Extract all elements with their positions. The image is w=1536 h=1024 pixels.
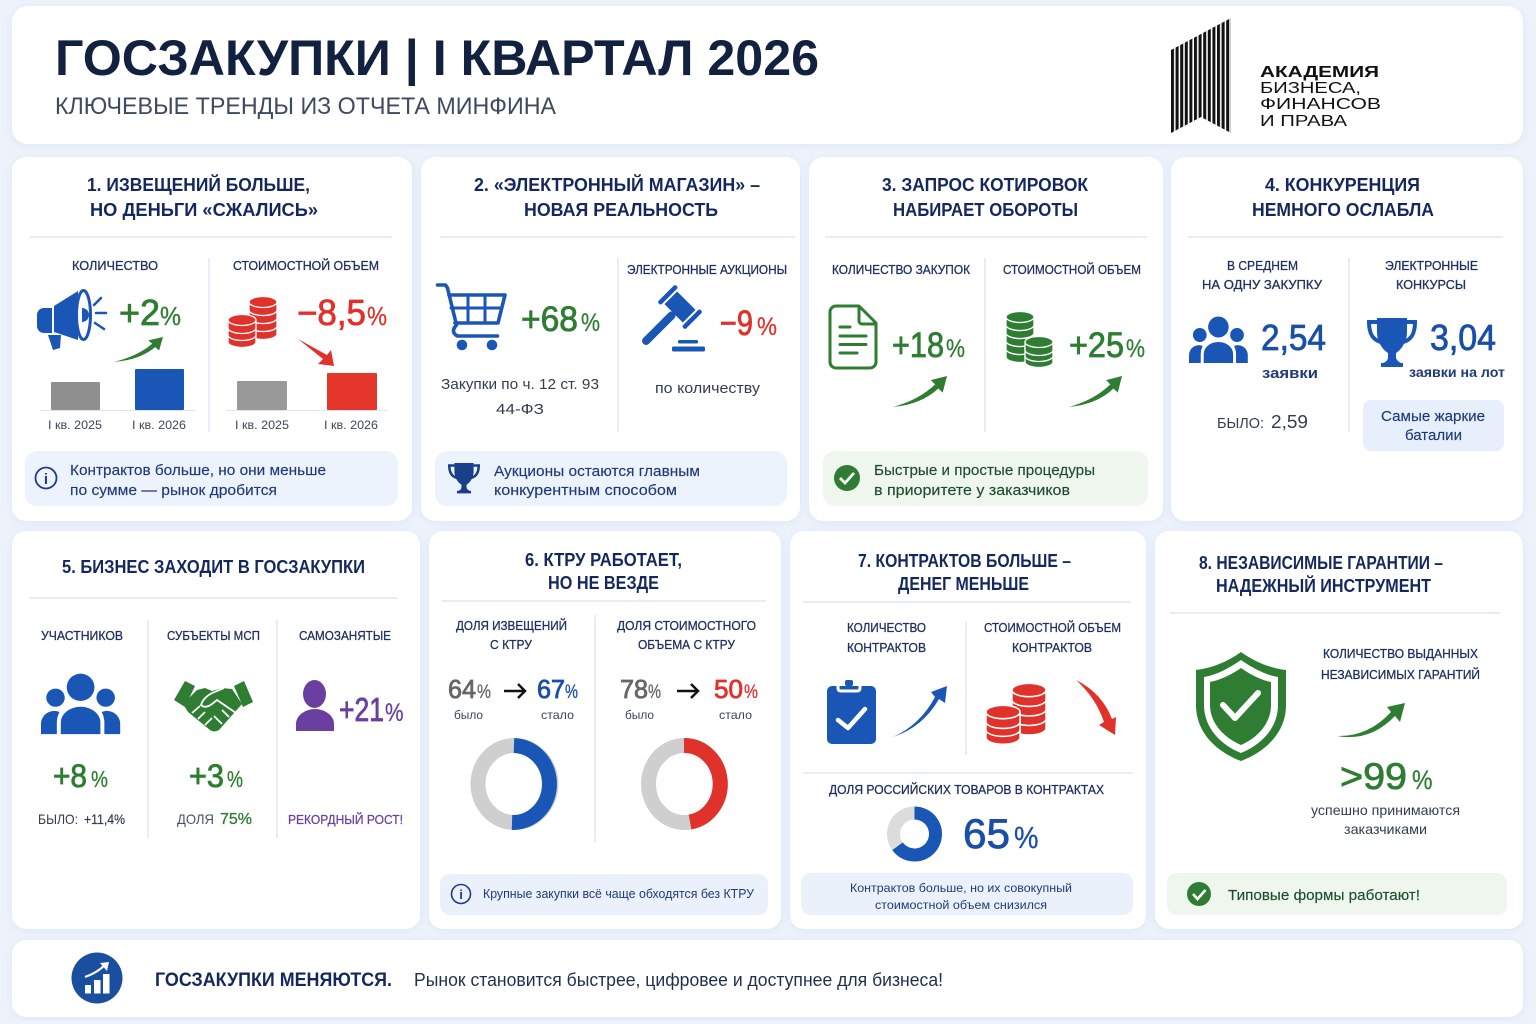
caption: bids: заявки: [1262, 365, 1318, 382]
heading 3: 3. ЗАПРОС КОТИРОВОК: [882, 174, 1089, 195]
icon: megaphone: [37, 290, 106, 350]
label contract value: [984, 620, 1121, 655]
value: plus 68 percent: %: [581, 309, 600, 337]
previous value: [1217, 412, 1308, 432]
comparison: value: стало: [719, 708, 752, 722]
arrow up: [114, 337, 163, 362]
comparison: value: 78: [620, 674, 648, 704]
bars: value: [226, 373, 388, 432]
heading 8: 8. НЕЗАВИСИМЫЕ ГАРАНТИИ –: [1199, 552, 1443, 573]
value: plus 25 percent: +25: [1069, 326, 1124, 365]
heading 6: 6. КТРУ РАБОТАЕТ,: [525, 549, 682, 570]
heading 4: НЕМНОГО ОСЛАБЛА: [1252, 199, 1434, 220]
donut: Russian goods: [894, 813, 936, 855]
note 6: Крупные закупки всё чаще обходятся без КТРУ: [483, 887, 754, 901]
panel 2: e-shop: [421, 157, 800, 521]
value: minus 8.5 percent: %: [367, 301, 387, 331]
value: 65 percent: [963, 810, 1038, 857]
label guarantees: НЕЗАВИСИМЫХ ГАРАНТИЙ: [1321, 667, 1480, 682]
icon: growth chart: [72, 952, 122, 1004]
value: 65 percent: 65: [963, 810, 1010, 857]
label guarantees: КОЛИЧЕСТВО ВЫДАННЫХ: [1323, 646, 1478, 661]
previous value: БЫЛО:: [1217, 415, 1264, 432]
footer heading: ГОСЗАКУПКИ МЕНЯЮТСЯ.: [155, 970, 392, 991]
label notices share: ДОЛЯ ИЗВЕЩЕНИЙ: [456, 618, 567, 633]
comparison: value: %: [648, 682, 661, 703]
comparison: notices: [448, 674, 578, 722]
label auctions: ЭЛЕКТРОННЫЕ АУКЦИОНЫ: [627, 262, 787, 277]
note 7: [801, 873, 1133, 915]
heading 1: 1. ИЗВЕЩЕНИЙ БОЛЬШЕ,: [87, 174, 310, 195]
note 1: по сумме — рынок дробится: [70, 482, 277, 499]
note 3: в приоритете у заказчиков: [874, 482, 1070, 499]
heading 7: ДЕНЕГ МЕНЬШЕ: [898, 573, 1029, 594]
arrow down: [298, 339, 334, 366]
comparison: value: было: [625, 708, 654, 722]
caption: accepted: [1311, 802, 1460, 837]
label contests: ЭЛЕКТРОННЫЕ: [1385, 258, 1478, 273]
label value: СТОИМОСТНОЙ ОБЪЕМ: [233, 258, 379, 273]
label contract count: КОНТРАКТОВ: [847, 640, 926, 655]
note 7: Контрактов больше, но их совокупный: [850, 881, 1072, 895]
icon: clipboard: [827, 680, 876, 744]
heading 2: 2. «ЭЛЕКТРОННЫЙ МАГАЗИН» –: [474, 174, 760, 195]
value: plus 18 percent: %: [946, 335, 965, 363]
panel 5: business: [12, 531, 420, 929]
comparison: value: [620, 674, 758, 722]
logo text: И ПРАВА: [1260, 113, 1347, 130]
caption: bids per lot: заявки на лот: [1409, 364, 1505, 380]
value: plus 8 percent: %: [91, 766, 108, 792]
note 3: [823, 451, 1148, 506]
donut: notices: [478, 746, 551, 823]
icon: shield: [1196, 652, 1286, 761]
comparison: notices: 64: [448, 674, 476, 704]
arrow up: [1069, 376, 1122, 407]
logo mark: [1171, 18, 1231, 133]
bars: quantity: [40, 369, 195, 432]
value: plus 18 percent: +18: [892, 326, 944, 365]
donut: value: [648, 745, 720, 822]
note 1: [25, 451, 398, 506]
caption: by count: по количеству: [655, 380, 761, 397]
bars: value: I кв. 2025: [235, 418, 289, 432]
bars: quantity: I кв. 2025: [48, 418, 102, 432]
caption: article: Закупки по ч. 12 ст. 93: [441, 376, 599, 393]
label average: [1202, 258, 1323, 292]
label value share: ДОЛЯ СТОИМОСТНОГО: [617, 618, 756, 633]
value: 2.54: 2,54: [1261, 317, 1326, 358]
value: minus 9 percent: −9: [720, 304, 753, 343]
note 3: Быстрые и простые процедуры: [874, 462, 1095, 479]
heading 3: НАБИРАЕТ ОБОРОТЫ: [893, 199, 1078, 220]
icon: gavel: [629, 284, 705, 358]
value: plus 2 percent: %: [160, 301, 181, 331]
icon: red coins: [986, 683, 1046, 744]
callout: баталии: [1405, 427, 1462, 444]
note 8: [1167, 873, 1507, 915]
footer text: Рынок становится быстрее, цифровее и доступнее для бизнеса!: [414, 970, 943, 990]
logo text: [1260, 64, 1381, 130]
header panel: [12, 6, 1523, 144]
value: plus 21 percent: +21: [339, 691, 384, 728]
heading 6: [525, 549, 682, 593]
arrow up: [893, 376, 947, 407]
icon: cart: [438, 285, 505, 348]
comparison: value: %: [744, 682, 758, 703]
icon: trophy: [1369, 318, 1415, 367]
comparison: notices: было: [454, 708, 483, 722]
caption: previous: [38, 811, 125, 827]
label contract count: КОЛИЧЕСТВО: [847, 620, 926, 635]
heading 7: 7. КОНТРАКТОВ БОЛЬШЕ –: [858, 550, 1071, 571]
comparison: notices: стало: [541, 708, 574, 722]
note 1: i: [44, 471, 48, 488]
subtitle: КЛЮЧЕВЫЕ ТРЕНДЫ ИЗ ОТЧЕТА МИНФИНА: [55, 93, 556, 120]
note 7: стоимостной объем снизился: [875, 898, 1047, 912]
bars: value: I кв. 2026: [324, 418, 378, 432]
label contract value: СТОИМОСТНОЙ ОБЪЕМ: [984, 620, 1121, 635]
comparison: notices: 67: [537, 674, 565, 704]
heading 2: НОВАЯ РЕАЛЬНОСТЬ: [524, 199, 718, 220]
icon: participants: [41, 674, 120, 734]
value: 99 percent: >99: [1340, 756, 1407, 797]
column labels: САМОЗАНЯТЫЕ: [299, 628, 391, 643]
label purchases: КОЛИЧЕСТВО ЗАКУПОК: [832, 262, 970, 277]
value: plus 3 percent: %: [227, 766, 243, 792]
logo text: ФИНАНСОВ: [1260, 96, 1381, 113]
label value share: ОБЪЕМА С КТРУ: [638, 637, 736, 652]
value: minus 8.5 percent: −8,5: [297, 292, 366, 333]
caption: article: 44-ФЗ: [496, 401, 544, 418]
heading 7: [858, 550, 1071, 594]
heading 5: 5. БИЗНЕС ЗАХОДИТ В ГОСЗАКУПКИ: [62, 556, 365, 577]
caption: accepted: заказчиками: [1344, 821, 1427, 837]
note 1: Контрактов больше, но они меньше: [70, 462, 326, 479]
value: plus 2 percent: [119, 292, 181, 333]
value: plus 21 percent: %: [385, 699, 404, 727]
icon: handshake: [174, 681, 253, 732]
comparison: notices: %: [477, 682, 491, 703]
label average: НА ОДНУ ЗАКУПКУ: [1202, 277, 1323, 292]
previous value: 2,59: [1271, 412, 1308, 432]
heading 4: [1252, 174, 1434, 220]
panel 6: KTRU: [429, 531, 781, 929]
label value share: [617, 618, 756, 652]
callout: Самые жаркие: [1381, 408, 1485, 425]
icon: green coins: [1006, 312, 1053, 368]
icon: person: [296, 680, 334, 731]
icon: document: [830, 306, 876, 368]
value: plus 3 percent: +3: [189, 758, 224, 794]
label contests: [1385, 258, 1478, 292]
caption: share: 75%: [220, 811, 252, 828]
label average: В СРЕДНЕМ: [1227, 258, 1298, 273]
caption: previous: +11,4%: [84, 811, 125, 827]
bars: quantity: I кв. 2026: [132, 418, 186, 432]
heading 1: НО ДЕНЬГИ «СЖАЛИСЬ»: [90, 199, 318, 220]
heading 6: НО НЕ ВЕЗДЕ: [548, 572, 659, 593]
logo text: БИЗНЕСА,: [1260, 80, 1361, 97]
label contests: КОНКУРСЫ: [1396, 277, 1466, 292]
label contract value: КОНТРАКТОВ: [1012, 640, 1092, 655]
heading 1: [87, 174, 318, 220]
label quantity: КОЛИЧЕСТВО: [72, 258, 158, 273]
note 8: Типовые формы работают!: [1228, 887, 1420, 904]
comparison: value: 50: [714, 674, 743, 704]
caption: article: [441, 376, 599, 418]
caption: previous: БЫЛО:: [38, 811, 78, 827]
panel 4: competition: [1171, 157, 1523, 521]
panel 3: quotations: [809, 157, 1163, 521]
column labels: СУБЪЕКТЫ МСП: [167, 628, 260, 643]
title: ГОСЗАКУПКИ | I КВАРТАЛ 2026: [55, 30, 819, 87]
value: plus 8 percent: [53, 758, 108, 794]
icon: people: [1189, 316, 1248, 363]
note 2: [435, 451, 787, 506]
label notices share: С КТРУ: [490, 637, 533, 652]
label guarantees: [1321, 646, 1480, 682]
column labels: УЧАСТНИКОВ: [41, 628, 123, 643]
callout: [1363, 400, 1504, 451]
note 2: Аукционы остаются главным: [494, 463, 700, 480]
value: minus 9 percent: %: [757, 313, 777, 341]
heading 4: 4. КОНКУРЕНЦИЯ: [1265, 174, 1420, 195]
arrow down red: [1076, 680, 1116, 735]
value: plus 68 percent: +68: [521, 300, 578, 339]
comparison: notices: %: [565, 682, 578, 703]
caption: record: РЕКОРДНЫЙ РОСТ!: [288, 812, 403, 827]
value: plus 3 percent: [189, 758, 243, 794]
arrow up: [1337, 703, 1405, 737]
value: plus 25 percent: %: [1126, 335, 1145, 363]
heading 8: НАДЕЖНЫЙ ИНСТРУМЕНТ: [1216, 575, 1432, 596]
heading 8: [1199, 552, 1443, 596]
note 6: [440, 874, 768, 915]
column labels: [41, 628, 391, 643]
value: 3.04: 3,04: [1430, 317, 1496, 358]
panel 8: guarantees: [1155, 531, 1523, 929]
value: plus 2 percent: +2: [119, 292, 160, 333]
label Russian goods: ДОЛЯ РОССИЙСКИХ ТОВАРОВ В КОНТРАКТАХ: [829, 782, 1104, 797]
footer panel: [12, 940, 1523, 1017]
note 6: i: [459, 887, 463, 902]
label notices share: [456, 618, 567, 652]
logo text: АКАДЕМИЯ: [1260, 64, 1379, 81]
icon: red coins: [228, 296, 277, 348]
value: 99 percent: %: [1412, 765, 1432, 795]
value: plus 8 percent: +8: [53, 758, 87, 794]
label contract count: [847, 620, 926, 655]
caption: share: ДОЛЯ: [177, 811, 214, 827]
label value: СТОИМОСТНОЙ ОБЪЕМ: [1003, 262, 1141, 277]
heading 2: [474, 174, 760, 220]
value: 65 percent: %: [1014, 820, 1038, 855]
caption: accepted: успешно принимаются: [1311, 802, 1460, 818]
caption: share: [177, 811, 252, 828]
note 2: конкурентным способом: [494, 482, 677, 499]
value: 99 percent: [1340, 756, 1432, 797]
arrow up blue: [893, 686, 947, 737]
panel 7: contracts: [790, 531, 1146, 929]
panel 1: notices: [12, 157, 412, 521]
heading 3: [882, 174, 1089, 220]
